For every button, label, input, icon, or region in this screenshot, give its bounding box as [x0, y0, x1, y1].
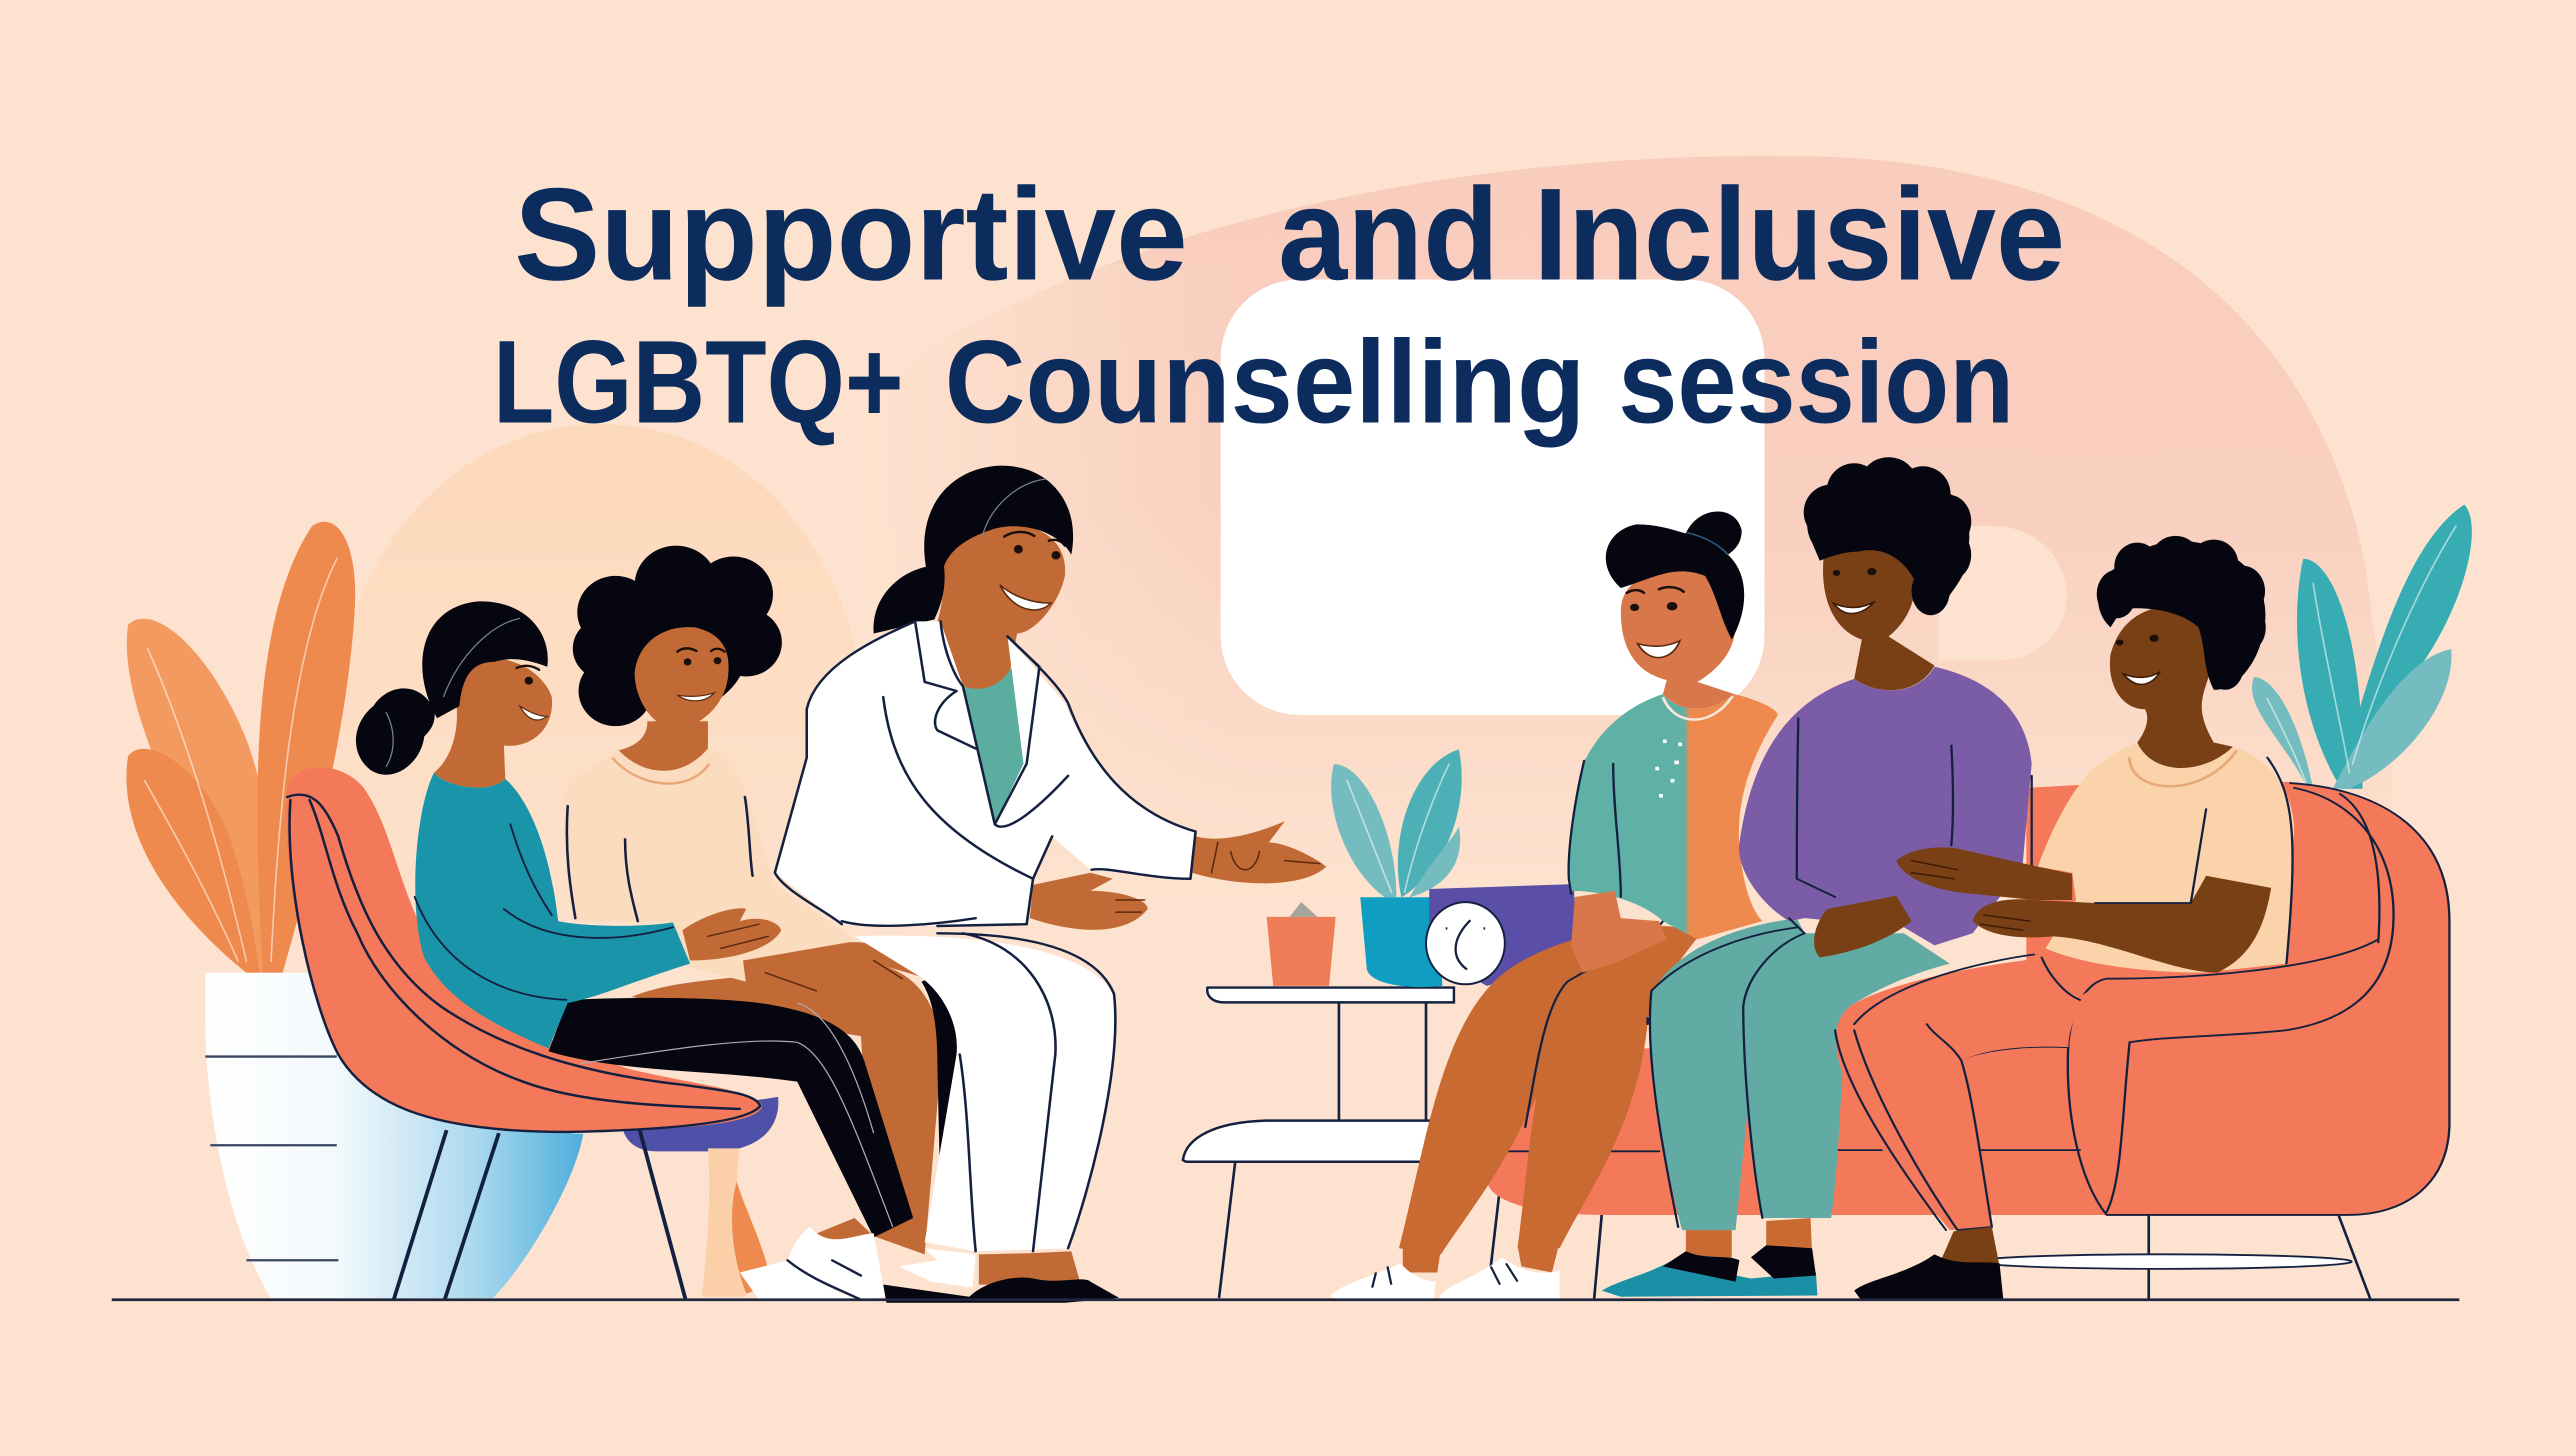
person B purple top: [1739, 667, 2032, 945]
person A head: [1621, 569, 1736, 709]
armchair legs: [394, 1130, 686, 1300]
person 1 black trousers: [549, 998, 913, 1237]
person C arms and hands: [1896, 758, 2293, 973]
person A hair: [1606, 511, 1744, 640]
person C tee: [2038, 742, 2294, 973]
title: session: [1618, 316, 2014, 448]
sofa: [1487, 782, 2449, 1215]
title: LGBTQ+: [493, 316, 904, 448]
person C coral trousers: [1835, 954, 2107, 1230]
person A top: teal and orange: [1569, 694, 1778, 939]
table lower shelf: [1183, 1121, 1438, 1162]
person 1 hair and bun: [356, 601, 548, 775]
icon: white and blue vase: [205, 973, 583, 1298]
left group of figures and armchair: [286, 466, 1326, 1303]
coral pot: [1267, 902, 1336, 986]
doctor white coat: [775, 621, 1196, 926]
person 1 neck and head: [434, 659, 552, 788]
doctor trousers: [855, 933, 1115, 1251]
purple cushion: [1429, 884, 1577, 986]
table top: [1207, 988, 1454, 1002]
person C head and neck: [2110, 606, 2233, 768]
person C hair: [2097, 536, 2266, 690]
small pale speech shape: [1939, 526, 2067, 661]
white speech panel: [1221, 280, 1764, 715]
right group of figures and sofa: [1330, 457, 2449, 1301]
doctor feet and shoes: [883, 1248, 1119, 1303]
person C foot and shoe: [1854, 1227, 2003, 1301]
icon: teal table plant: [1331, 749, 1462, 897]
doctor hair: [873, 466, 1073, 633]
doctor neck and head: [937, 524, 1065, 691]
person B legs: teal trousers: [1648, 918, 1950, 1230]
person 1 hands: [682, 908, 928, 997]
title: Supportive: [514, 161, 1188, 308]
ground line: [112, 1299, 2459, 1301]
sofa legs: [1487, 1188, 2371, 1300]
armchair: [286, 767, 762, 1132]
background pink blob: [854, 156, 2392, 986]
icon: orange plant left: [126, 522, 355, 973]
doctor near hand: [1030, 873, 1148, 930]
person B shoes and ankles: [1602, 1218, 1817, 1297]
person 2 top: [564, 749, 851, 982]
person B hand: [1814, 896, 1912, 958]
person 2 far leg: brown: [631, 961, 959, 1254]
doctor shirt: [963, 658, 1027, 824]
doctor hand details: [1116, 842, 1320, 912]
coffee table: [1183, 902, 1454, 1298]
teal plant pot: [1360, 897, 1442, 987]
purple stool: [622, 1097, 778, 1151]
table legs: [1219, 999, 1426, 1298]
person B head and neck: [1823, 544, 1935, 690]
title: Counselling: [945, 316, 1585, 448]
doctor far hand: [1192, 821, 1326, 883]
icon: white clock: [1426, 902, 1505, 984]
stool support: [702, 1148, 772, 1297]
person A legs: [1399, 921, 1701, 1272]
person 2 head and hair: [573, 546, 782, 771]
person B hair: [1804, 457, 1971, 615]
title: [493, 161, 2065, 448]
background arch behind seated people: [337, 424, 866, 1019]
icon: teal plant right: [2252, 505, 2472, 789]
title: and Inclusive: [1278, 161, 2065, 308]
person 1 foot and shoe: [740, 1218, 885, 1300]
person A hand on knee: [1571, 891, 1667, 973]
person 1 teal top: [415, 773, 690, 1048]
person A white shoes: [1330, 1257, 1560, 1301]
